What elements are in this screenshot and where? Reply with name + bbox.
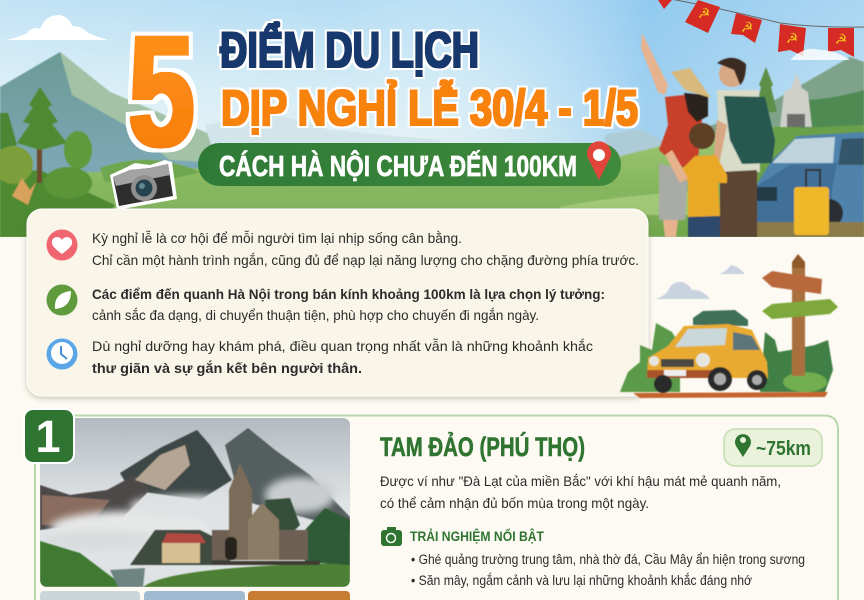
- bunting flags: ☭: [786, 30, 798, 46]
- pill text: CÁCH HÀ NỘI CHƯA ĐẾN 100KM: [219, 149, 577, 183]
- number badge: [24, 409, 74, 463]
- experience bullets: [411, 552, 805, 588]
- bunting flags: [658, 0, 864, 57]
- text: paragraph 2: Các điểm đến quanh Hà Nội trong bán kính khoảng 100km là lựa chọn lý tưởng:: [92, 286, 605, 302]
- distance pill: [198, 141, 621, 186]
- cloud left: [6, 15, 108, 40]
- camera sticker: [110, 160, 177, 210]
- description: [380, 473, 781, 511]
- distance value: ~75km: [756, 438, 811, 460]
- text: paragraph 2: [92, 286, 605, 323]
- mountain left: [0, 52, 662, 181]
- text: paragraph 2: cảnh sắc đa dạng, di chuyển thuận tiện, phù hợp cho chuyến đi ngắn ngày.: [92, 307, 539, 323]
- sky: [0, 0, 864, 143]
- icon: leaf: [46, 284, 78, 316]
- number badge: 1: [35, 411, 61, 462]
- description: có thể cảm nhận đủ bốn mùa trong một ngày.: [380, 495, 649, 511]
- experience bullets: • Săn mây, ngắm cảnh và lưu lại những khoảnh khắc đáng nhớ: [411, 573, 752, 588]
- experience bullets: • Ghé quảng trường trung tâm, nhà thờ đá, Cầu Mây ẩn hiện trong sương: [411, 552, 805, 567]
- text: paragraph 3: [92, 338, 593, 376]
- bushes: [620, 323, 833, 392]
- title number 5: 5: [128, 5, 195, 179]
- text: paragraph 3: thư giãn và sự gắn kết bên người thân.: [92, 359, 362, 376]
- distant hills right: [710, 56, 864, 135]
- family: [641, 33, 775, 237]
- pine and pagoda: [755, 67, 812, 127]
- bunting flags: ☭: [698, 5, 710, 21]
- child: [665, 123, 727, 237]
- blue car: [755, 132, 864, 237]
- icon: map pin: [587, 141, 611, 180]
- text: paragraph 1: Chỉ cần một hành trình ngắn, cũng đủ để nạp lại năng lượng cho chặng đường phía trước.: [92, 252, 639, 268]
- photo thumbnails: [40, 591, 350, 600]
- photo: Tam Dao church: [40, 418, 350, 587]
- bunting flags: ☭: [835, 31, 847, 47]
- text: paragraph 3: Dù nghỉ dưỡng hay khám phá, điều quan trọng nhất vẫn là những khoảnh khắc: [92, 338, 593, 354]
- trees left: [0, 87, 200, 237]
- destination heading: TAM ĐẢO (PHÚ THỌ): [380, 430, 585, 462]
- icon: camera: [381, 527, 402, 546]
- illustration: yellow car with signpost: [620, 254, 838, 398]
- card frame: [35, 416, 838, 600]
- text: paragraph 1: [92, 230, 639, 268]
- man: [713, 58, 775, 237]
- description: Được ví như "Đà Lạt của miền Bắc" với khí hậu mát mẻ quanh năm,: [380, 473, 781, 489]
- panel: intro: [27, 209, 648, 396]
- text: paragraph 1: Kỳ nghỉ lễ là cơ hội để mỗi người tìm lại nhịp sống cân bằng.: [92, 230, 462, 246]
- card background: [27, 209, 648, 396]
- car: [647, 310, 768, 393]
- experience heading: TRẢI NGHIỆM NỔI BẬT: [410, 527, 544, 544]
- signpost: [762, 254, 838, 376]
- green meadow: [0, 90, 864, 237]
- icon: map pin: [735, 434, 751, 457]
- title line 1: ĐIỂM DU LỊCH: [220, 22, 479, 78]
- woman: [641, 33, 711, 237]
- bunting flags: ☭: [741, 19, 753, 35]
- hero illustration: [0, 0, 864, 237]
- panel: destination 1: [24, 409, 838, 600]
- title line 2: DỊP NGHỈ LỄ 30/4 - 1/5: [221, 80, 638, 136]
- clouds: [655, 265, 745, 299]
- small cloud right: [790, 49, 850, 60]
- icon: clock: [46, 338, 78, 370]
- road: [633, 392, 828, 398]
- icon: heart: [46, 230, 78, 260]
- distance tag: [724, 429, 822, 466]
